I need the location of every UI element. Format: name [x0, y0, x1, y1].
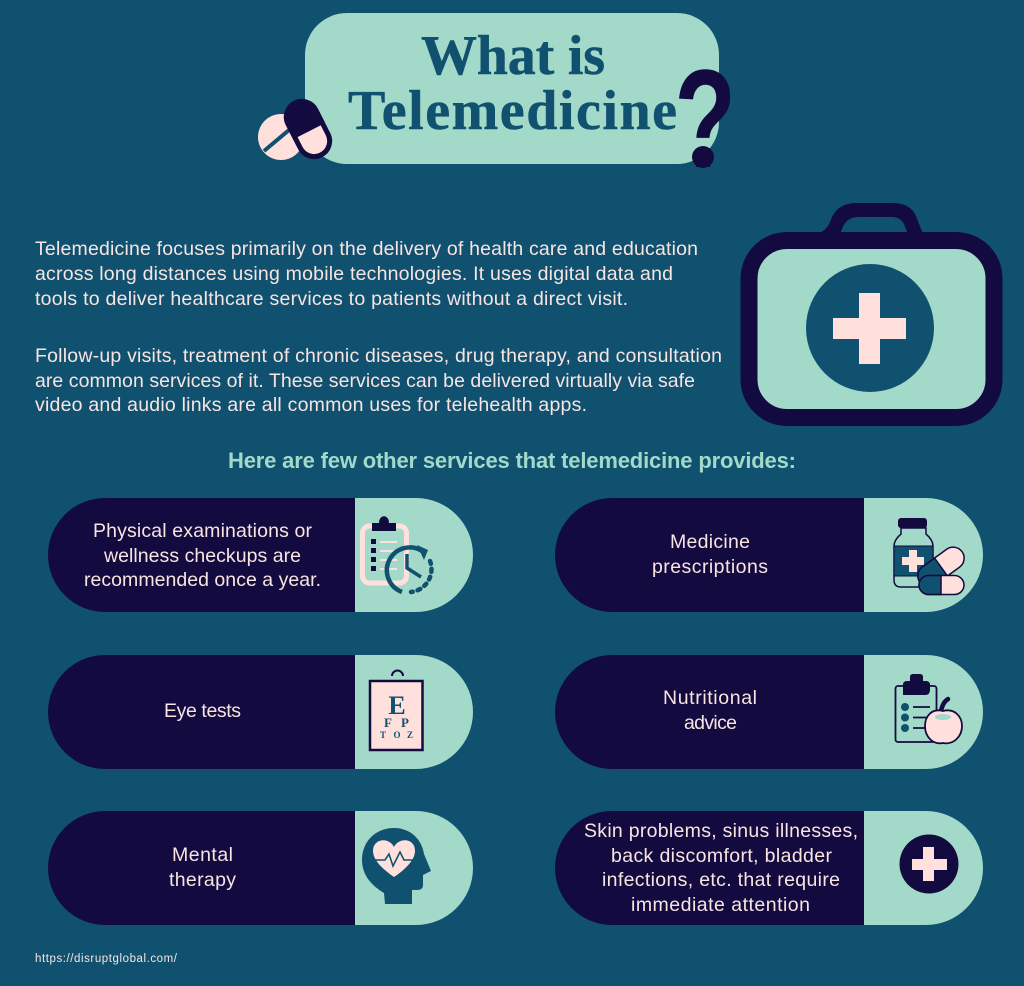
title: Telemedicine — [348, 80, 677, 142]
heading: services: Here are few other services that telemedicine provides: — [228, 448, 796, 473]
card text: immediate attention — [631, 894, 810, 916]
icon: medical kit — [749, 203, 994, 418]
title: What is — [421, 25, 605, 87]
card text: Physical examinations or — [93, 520, 312, 542]
icon: eye chart — [370, 670, 422, 750]
card text: Skin problems, sinus illnesses, — [584, 820, 858, 842]
card text: prescriptions — [652, 556, 768, 578]
card text: advice — [684, 712, 737, 734]
card: medicine prescriptions — [555, 498, 983, 612]
card text: infections, etc. that require — [602, 869, 840, 891]
card text — [169, 844, 236, 891]
card text: therapy — [169, 869, 236, 891]
icon: eye chart: E — [388, 691, 406, 720]
icon: head with heart — [362, 828, 431, 904]
text block: intro paragraph 1: tools to deliver healthcare services to patients without a direct visit. — [35, 288, 628, 310]
text block: intro paragraph 2: are common services of it. These services can be delivered virtually via safe — [35, 370, 695, 392]
card text: back discomfort, bladder — [611, 845, 832, 867]
card text — [84, 520, 321, 591]
icon: eye chart: T — [380, 730, 386, 740]
title — [348, 25, 677, 142]
title badge — [305, 13, 719, 164]
card: skin problems and urgent care — [555, 811, 983, 925]
icon: pills — [258, 96, 335, 162]
card text — [663, 687, 757, 734]
card: nutritional advice — [555, 655, 983, 769]
icon: eye chart: Z — [407, 730, 413, 740]
icon: eye chart: F — [384, 715, 392, 730]
text block: intro paragraph 2: video and audio links are all common uses for telehealth apps. — [35, 394, 587, 416]
card text: Mental — [172, 844, 233, 866]
icon: eye chart: P — [401, 715, 409, 730]
text block: intro paragraph 2 — [35, 345, 722, 416]
card text: wellness checkups are — [103, 545, 301, 567]
icon: eye chart: O — [393, 730, 401, 740]
icon: question mark: ? — [674, 41, 736, 197]
card: mental therapy — [48, 811, 473, 925]
card text: Medicine — [670, 531, 750, 553]
source url: https://disruptglobal.com/ — [35, 953, 178, 965]
card text — [584, 820, 858, 916]
card text: recommended once a year. — [84, 569, 321, 591]
text block: intro paragraph 1: across long distances using mobile technologies. It uses digital data and — [35, 263, 673, 285]
card text: Eye tests — [164, 700, 241, 722]
icon: clipboard and clock — [362, 516, 431, 592]
card text: Nutritional — [663, 687, 757, 709]
card: physical examinations — [48, 498, 473, 612]
icon: clipboard and apple — [896, 674, 962, 743]
text block: intro paragraph 2: Follow-up visits, treatment of chronic diseases, drug therapy, and consultation — [35, 345, 722, 367]
text block: intro paragraph 1: Telemedicine focuses primarily on the delivery of health care and education — [35, 238, 698, 260]
icon: medicine bottle and capsules — [894, 518, 969, 594]
card: eye tests — [48, 655, 473, 769]
text block: intro paragraph 1 — [35, 238, 698, 310]
card text — [652, 531, 768, 578]
icon: plus in circle — [900, 834, 958, 894]
